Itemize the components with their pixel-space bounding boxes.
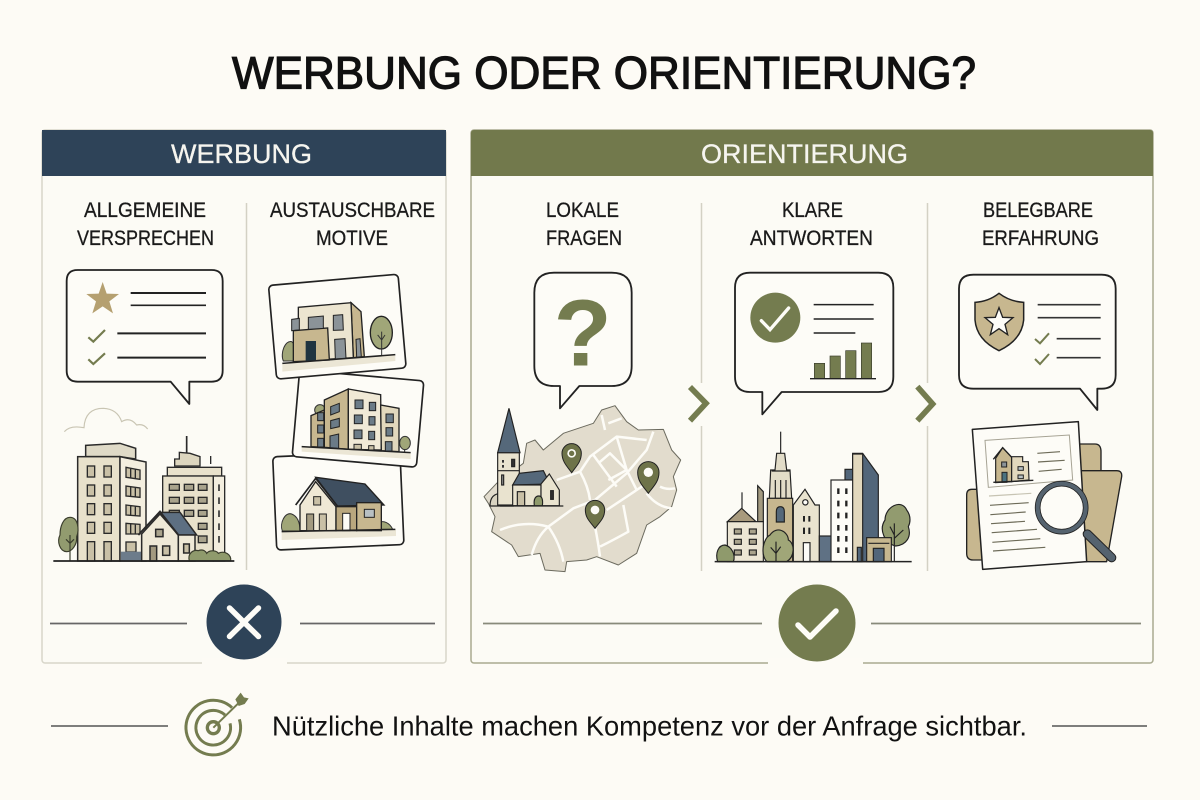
- badge: check: [778, 584, 856, 662]
- header: Orientierung: ORIENTIERUNG: [701, 139, 908, 169]
- footer rule right: [1052, 725, 1147, 727]
- divider line right of X badge: [300, 622, 435, 624]
- map pin 1: [562, 444, 581, 473]
- arrow: chevron 1: [690, 387, 706, 421]
- church: [490, 408, 563, 506]
- document: [972, 422, 1087, 569]
- left tower: [78, 443, 146, 561]
- question bubble: [534, 273, 632, 408]
- column heading: Klare Antworten: ANTWORTEN: [750, 227, 873, 250]
- divider line left of X badge: [50, 622, 187, 624]
- divider line right of check badge: [871, 622, 1141, 624]
- column heading: Lokale Fragen: FRAGEN: [546, 227, 622, 250]
- ground line: [715, 559, 912, 564]
- card: apartment block: [292, 370, 424, 467]
- column heading: Austauschbare Motive: MOTIVE: [316, 227, 388, 250]
- illustration: interchangeable motif cards: [268, 274, 424, 550]
- illustration: local questions and map: [484, 273, 706, 572]
- header: Werbung: [42, 130, 446, 176]
- column heading: Allgemeine Versprechen: ALLGEMEINE: [84, 199, 206, 222]
- magnifying glass: [1038, 484, 1112, 558]
- illustration: promise bubble and city: [53, 270, 234, 561]
- illustration: verifiable experience: [959, 275, 1122, 569]
- column heading: Klare Antworten: KLARE: [782, 199, 843, 222]
- district map: [484, 406, 681, 572]
- column heading: Allgemeine Versprechen: VERSPRECHEN: [77, 227, 214, 250]
- card: modern house: [268, 274, 406, 379]
- badge: X: [206, 584, 282, 660]
- map pin 2: [638, 462, 659, 493]
- column heading: Belegbare Erfahrung: BELEGBARE: [983, 199, 1093, 222]
- skyline: [717, 432, 910, 562]
- folder: [967, 444, 1122, 562]
- panel: Orientierung: [471, 130, 1153, 666]
- column heading: Belegbare Erfahrung: ERFAHRUNG: [982, 227, 1099, 250]
- map pin 3: [585, 500, 605, 528]
- evidence bubble: [959, 275, 1116, 410]
- tree and shrubs: [59, 517, 231, 561]
- card: house: [273, 451, 404, 550]
- header: Orientierung: [471, 130, 1153, 176]
- panel: Werbung: [42, 130, 446, 666]
- title: WERBUNG ODER ORIENTIERUNG?: [232, 48, 976, 98]
- ground line: [53, 558, 234, 563]
- answer bubble: [735, 273, 893, 414]
- divider line left of check badge: [483, 622, 762, 624]
- speech bubble with star and checks: [67, 270, 223, 404]
- cloud: [64, 408, 148, 432]
- column heading: Austauschbare Motive: AUSTAUSCHBARE: [270, 199, 435, 222]
- icon: target with arrow: [186, 693, 249, 755]
- illustration: clear answers and skyline: [715, 273, 933, 562]
- right tower: [163, 436, 225, 561]
- arrow: chevron 2: [917, 387, 933, 421]
- small house: [138, 512, 197, 561]
- header: Werbung: WERBUNG: [171, 139, 312, 169]
- footer statement: Nützliche Inhalte machen Kompetenz vor der Anfrage sichtbar.: [272, 710, 1027, 742]
- column heading: Lokale Fragen: LOKALE: [546, 199, 619, 222]
- footer rule left: [51, 725, 168, 727]
- question bubble: ?: [554, 280, 612, 386]
